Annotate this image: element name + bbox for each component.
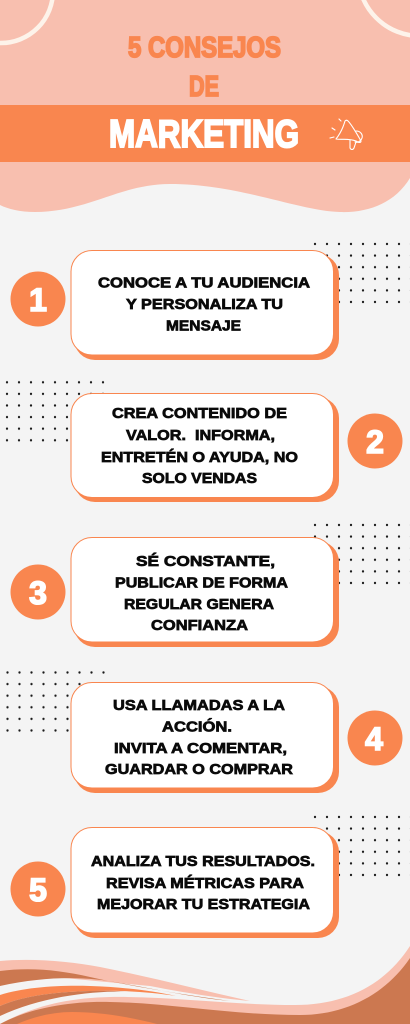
decorative arc top right [358,0,410,36]
card 1 text [98,276,311,334]
title band [0,105,410,162]
dot grid: lower left [2,667,110,736]
card 4 text: USA LLAMADAS A LA [113,698,286,714]
card 1 text: Y PERSONALIZA TU [126,297,283,313]
dot grid: top right [309,238,410,308]
card 4 text: INVITA A COMENTAR, [114,741,287,757]
card 2 text: CREA CONTENIDO DE [112,406,287,422]
dot grid: upper left [1,376,109,446]
card 4 text [105,698,294,778]
title line: marketing: MARKETING [109,113,299,156]
dot grid: bottom right [309,811,410,881]
card 2 text: ENTRETÉN O AYUDA, NO [101,449,298,466]
number badge 2: 2 [366,424,384,460]
card 2 [71,394,339,502]
footer waves [0,946,410,1024]
card 5 text: ANALIZA TUS RESULTADOS. [91,854,315,870]
number badge 3 [10,564,66,620]
header panel [0,0,410,212]
decorative arc top left [0,0,53,43]
card 4 text: ACCIÓN. [162,718,232,736]
step 2 [71,394,402,502]
number badge 4 [348,710,402,766]
icon: megaphone [330,119,362,150]
title line: de: DE [189,71,219,103]
card 5 text: MEJORAR TU ESTRATEGIA [97,897,311,913]
title line: 5 consejos: 5 CONSEJOS [128,32,281,64]
card 2 text: SOLO VENDAS [142,471,257,487]
dot grid: middle right [309,519,410,589]
card 3 text: REGULAR GENERA [124,597,275,613]
card 2 text: VALOR. INFORMA, [126,428,275,444]
step 1 [10,250,339,360]
card 4 [71,682,339,793]
card 4 text: GUARDAR O COMPRAR [105,762,294,778]
number badge 5: 5 [29,872,47,908]
card 2 text [101,406,298,487]
card 3 text [115,553,289,634]
step 3 [10,538,339,647]
card 5 text: REVISA MÉTRICAS PARA [106,875,305,892]
card 3 [71,538,339,647]
number badge 1: 1 [29,282,47,318]
step 5 [10,828,339,938]
card 5 text [91,854,315,913]
card 1 text: CONOCE A TU AUDIENCIA [98,276,311,292]
card 1 text: MENSAJE [166,318,241,334]
card 3 text: CONFIANZA [151,618,249,634]
step 4 [71,682,402,793]
number badge 1 [10,272,66,326]
card 3 text: SÉ CONSTANTE, [136,553,275,570]
number badge 3: 3 [29,575,47,611]
card 5 [71,828,339,938]
number badge 2 [348,414,402,468]
number badge 5 [10,862,66,916]
number badge 4: 4 [365,721,383,757]
card 1 [71,250,339,360]
header wave background [0,0,410,212]
card 3 text: PUBLICAR DE FORMA [115,576,289,592]
